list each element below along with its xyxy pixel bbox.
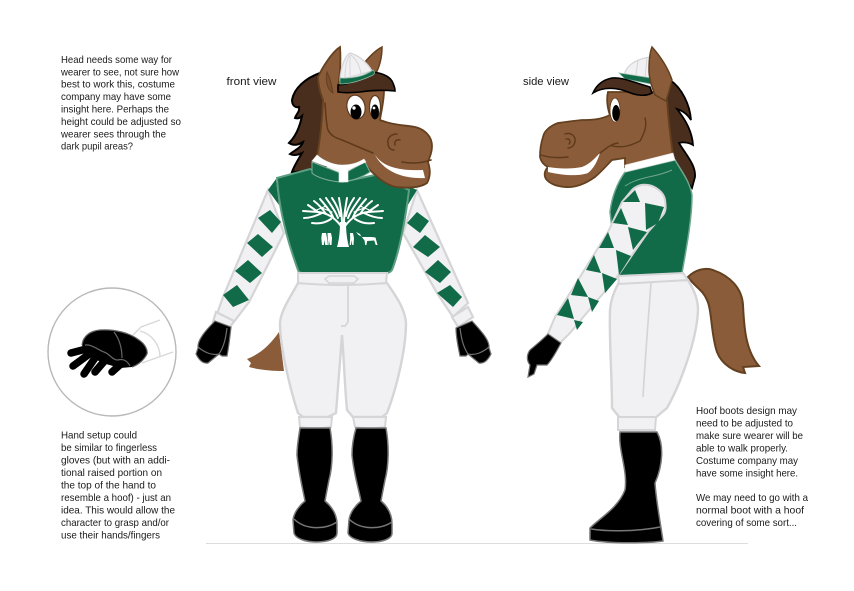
right arm: [403, 186, 473, 327]
inner ear: [326, 72, 333, 93]
pants: [280, 273, 406, 428]
mouth line (side): [541, 118, 646, 158]
note: head visibility: height could be adjusted so: [61, 117, 181, 128]
eye (side): [610, 98, 620, 122]
label: front view: front view: [226, 76, 277, 88]
note: head visibility: dark pupil areas?: [61, 142, 133, 153]
forelock: [338, 72, 395, 93]
nostril: [388, 134, 400, 150]
collar: [312, 155, 370, 182]
eyes: [345, 93, 380, 121]
tail (side): [688, 269, 759, 373]
glove (side): [527, 334, 561, 377]
tail (front): [247, 332, 284, 371]
mouth line: [325, 103, 431, 163]
note: hand setup: the top of the hand to: [61, 480, 156, 492]
right ear: [365, 47, 382, 75]
note: head visibility: wearer to see, not sure how: [60, 67, 179, 78]
note: hoof boots: make sure wearer will be: [696, 431, 803, 442]
note: head visibility: company may have some: [61, 92, 171, 103]
mane (side): [664, 80, 695, 188]
glove: [71, 330, 147, 374]
head: [317, 47, 432, 188]
teeth (side): [548, 153, 600, 175]
nostril (side): [565, 133, 575, 148]
left boot: [293, 428, 337, 542]
note: hoof boots: have some insight here.: [696, 468, 798, 480]
head (side): [540, 92, 673, 187]
side view horse: [527, 47, 759, 543]
note: hand setup: be similar to fingerless: [61, 443, 157, 454]
note: hand setup: tional raised portion on: [61, 468, 162, 479]
note: hoof boots: We may need to go with a: [696, 493, 808, 504]
note: hoof boots: [696, 406, 808, 529]
front view horse: [196, 47, 491, 542]
note: hoof boots: Hoof boots design may: [696, 406, 798, 417]
knee bands: [299, 417, 332, 428]
note: hoof boots: normal boot with a hoof: [696, 506, 804, 516]
note: hand setup: [61, 430, 175, 542]
left glove: [196, 321, 231, 363]
mane (front): [289, 73, 340, 172]
note: hand setup: idea. This would allow the: [61, 506, 175, 516]
note: head visibility: wearer sees through the: [60, 129, 166, 140]
pants (side): [610, 273, 698, 430]
note: hand setup: use their hands/fingers: [61, 530, 160, 542]
right glove: [456, 321, 491, 363]
jersey (side): [610, 153, 692, 276]
arm (side): [547, 185, 666, 343]
cap: [340, 53, 374, 84]
right boot: [348, 428, 392, 542]
note: hoof boots: need to be adjusted to: [696, 419, 793, 430]
ear (side): [649, 47, 672, 101]
note: hand setup: character to grasp and/or: [61, 518, 170, 529]
ground line: [206, 542, 748, 544]
sleeve outline: [133, 320, 173, 363]
fly: [341, 284, 348, 326]
boot (side): [590, 432, 663, 543]
teeth: [375, 155, 425, 178]
jersey: [277, 169, 409, 273]
hand detail circle: [48, 288, 176, 416]
cap (side): [619, 57, 651, 84]
note: hand setup: resemble a hoof) - just an: [61, 493, 171, 504]
label: side view: side view: [523, 76, 569, 88]
note: head visibility: best to work this, costume: [61, 80, 175, 91]
forelock (side): [593, 78, 652, 95]
note: hoof boots: able to walk properly.: [696, 444, 788, 454]
note: hoof boots: Costume company may: [696, 456, 799, 467]
note: hoof boots: covering of some sort...: [696, 518, 797, 529]
note: hand setup: gloves (but with an addi-: [61, 456, 170, 466]
note: head visibility: insight here. Perhaps the: [61, 104, 169, 116]
waistband: [298, 273, 387, 285]
logo: tree with people and horse: [303, 198, 383, 247]
note: head visibility: [60, 55, 181, 153]
note: hand setup: Hand setup could: [61, 430, 137, 442]
note: head visibility: Head needs some way for: [61, 55, 172, 66]
left arm: [213, 179, 284, 329]
